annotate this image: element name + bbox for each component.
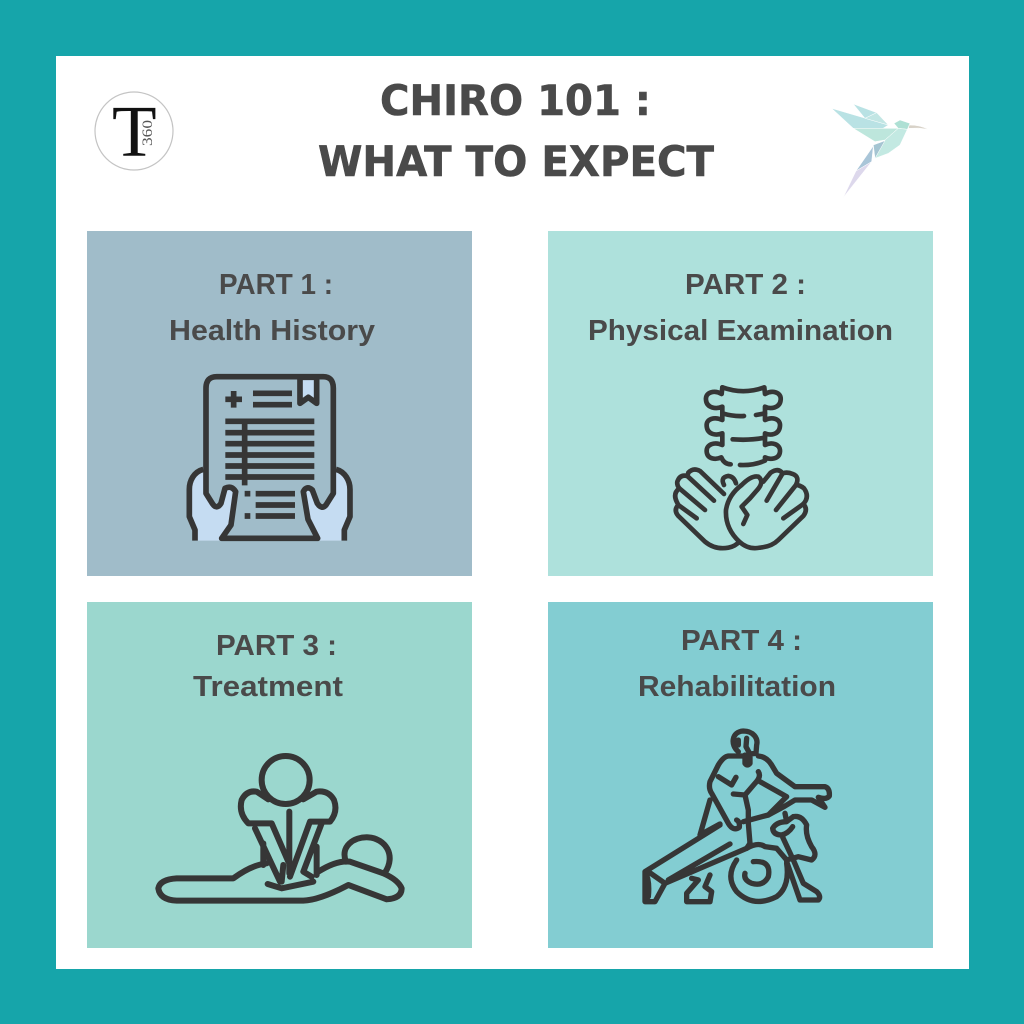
panel: part 3 treatment bbox=[87, 602, 472, 948]
title: CHIRO 101 : bbox=[380, 76, 651, 125]
heading: health history: Health History bbox=[169, 315, 375, 347]
heading: part 3: PART 3 : bbox=[216, 630, 337, 662]
heading: physical examination: Physical Examination bbox=[588, 315, 893, 347]
icon: massage treatment bbox=[158, 756, 402, 901]
logo: T360 circle bbox=[95, 91, 173, 172]
heading: rehabilitation: Rehabilitation bbox=[638, 671, 836, 703]
icon: medical record held in hands bbox=[189, 377, 350, 541]
logo: hummingbird bbox=[832, 104, 928, 197]
icon: therapist stretching patient bbox=[645, 731, 829, 902]
heading: treatment: Treatment bbox=[193, 671, 344, 703]
title: WHAT TO EXPECT bbox=[318, 137, 714, 186]
panel: part 2 physical examination bbox=[548, 231, 933, 576]
icon: spine and hands bbox=[675, 387, 807, 548]
logo: T360 circle: 360 bbox=[140, 120, 156, 146]
title bbox=[318, 76, 714, 186]
panel: part 1 health history bbox=[87, 231, 472, 576]
heading: part 4: PART 4 : bbox=[681, 625, 802, 657]
heading: part 1: PART 1 : bbox=[219, 269, 333, 301]
logo: T360 circle: T bbox=[112, 91, 157, 172]
heading: part 2: PART 2 : bbox=[685, 269, 806, 301]
panel: part 4 rehabilitation bbox=[548, 602, 933, 948]
